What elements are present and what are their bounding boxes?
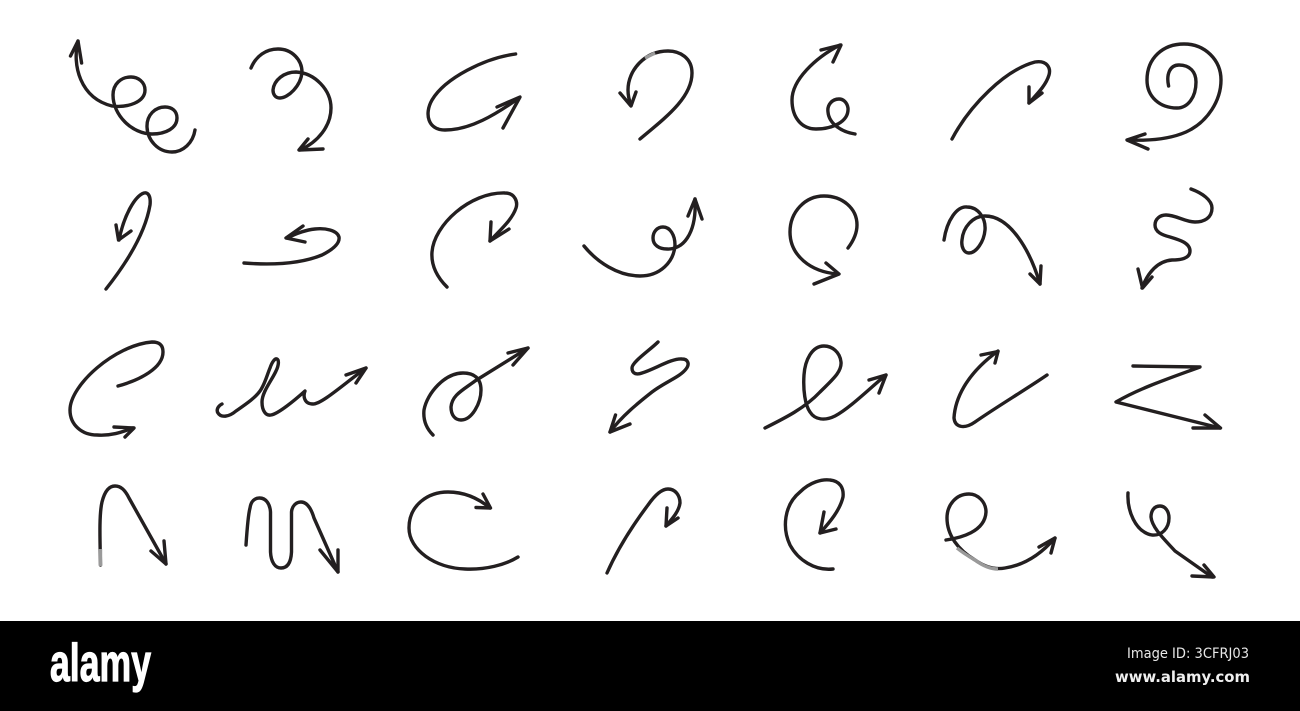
image id: Image ID: 3CFRJ03 xyxy=(1127,646,1249,662)
arrow: wide hook pointing down-left xyxy=(432,193,517,287)
footer bar xyxy=(0,621,1300,711)
arrow: M wave pointing down-right xyxy=(246,498,338,572)
logo: alamy: alamy xyxy=(50,634,151,693)
arrow: small loop curving up-right xyxy=(792,45,855,134)
arrow: loop falling down-right xyxy=(944,207,1041,284)
arrow: squiggle pointing down-left xyxy=(1138,189,1212,288)
arrow: loop pointing up-right xyxy=(424,348,528,435)
arrow: narrow hook pointing down xyxy=(106,193,150,289)
arrow: V turn pointing up xyxy=(954,351,1047,427)
arrow: small loop pointing down-right xyxy=(1128,493,1214,577)
arrow: open C pointing right xyxy=(70,342,163,437)
arrow: C hook pointing down-left xyxy=(785,480,843,569)
arrow: flat hook pointing left xyxy=(244,226,339,264)
arrow: circular pointing right xyxy=(790,196,857,284)
arrow: double loop pointing up-left xyxy=(70,41,195,152)
arrow: scribble pointing up-right xyxy=(217,359,366,416)
arrow: zigzag pointing down-left xyxy=(610,342,688,432)
arrow: tall loop pointing up-right xyxy=(765,346,886,428)
website: www.alamy.com xyxy=(1115,668,1250,686)
arrow: oval hook pointing up-right xyxy=(428,54,520,130)
arrow: long arc hooking down xyxy=(952,62,1049,139)
arrow: single loop curling down-left xyxy=(251,49,331,150)
arrow: spiral pointing left xyxy=(1127,44,1221,149)
arrow: Z shape pointing right xyxy=(1116,366,1220,428)
arrow: hook curving back down xyxy=(620,51,692,139)
arrow: large C pointing right xyxy=(409,492,518,569)
arrow grid xyxy=(70,41,1221,577)
arrow: loop swooping up-right xyxy=(946,494,1055,569)
arrow: swoop with loop pointing up xyxy=(584,199,702,276)
arrow: inverted U pointing down-right xyxy=(100,486,166,566)
arrow: rising arc hooking down xyxy=(607,489,680,573)
